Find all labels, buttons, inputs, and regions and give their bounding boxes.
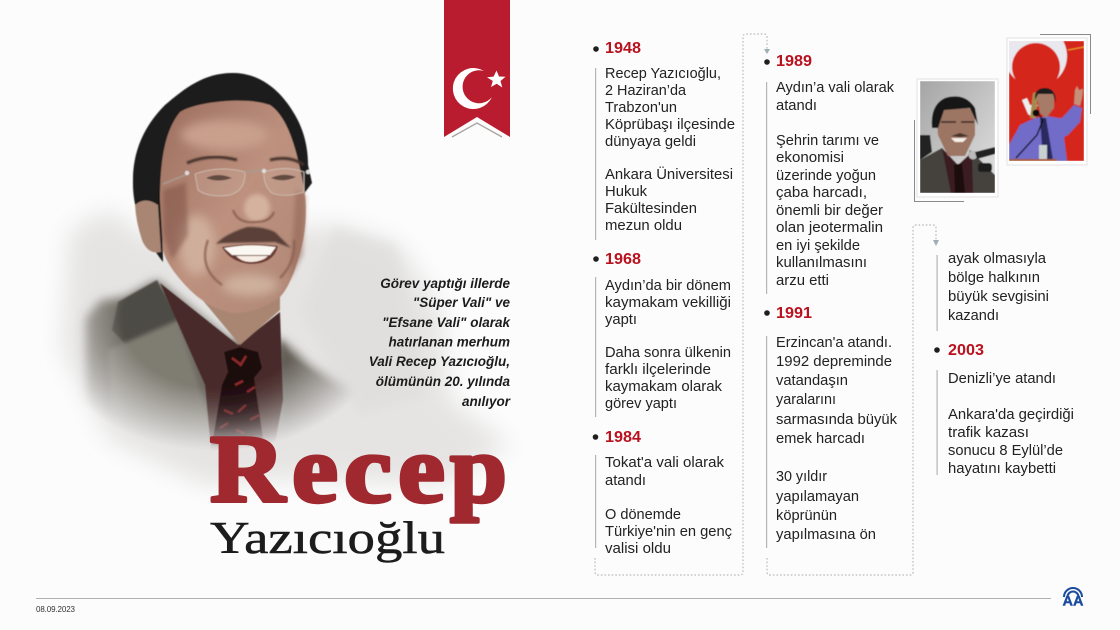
face bbox=[160, 101, 306, 313]
brows bbox=[187, 157, 304, 165]
timeline column 2 bbox=[764, 53, 898, 548]
title: Recep: R bbox=[210, 416, 287, 522]
title: Recep: p bbox=[450, 416, 507, 522]
1948 entry: Hukuk bbox=[605, 184, 648, 200]
1984 entry: 1984 bbox=[605, 429, 641, 446]
1989 entry: en iyi şekilde bbox=[776, 238, 860, 254]
1984 entry: valisi oldu bbox=[605, 541, 671, 557]
1968 entry: yaptı bbox=[605, 312, 637, 328]
timeline column 3 bbox=[934, 251, 1074, 477]
1991 entry: yapılamayan bbox=[776, 489, 859, 505]
1968 entry: farklı ilçelerinde bbox=[605, 362, 711, 378]
smile crease bbox=[205, 240, 294, 285]
1984 entry: Türkiye'nin en genç bbox=[605, 524, 732, 540]
tie bbox=[212, 347, 264, 445]
title: Recep: e bbox=[292, 416, 338, 522]
hair bbox=[133, 73, 312, 262]
photo: raised arm in front of flag bbox=[1005, 25, 1090, 165]
1989 entry: önemli bir değer bbox=[776, 203, 883, 219]
1989 entry: atandı bbox=[776, 98, 817, 114]
intro paragraph: anılıyor bbox=[462, 394, 511, 409]
1948 entry: Recep Yazıcıoğlu, bbox=[605, 66, 721, 82]
2003 entry: sonucu 8 Eylül’de bbox=[948, 443, 1063, 459]
1991 entry: 1991 bbox=[776, 305, 812, 322]
1991 entry: 1992 depreminde bbox=[776, 354, 892, 370]
continued text: bölge halkının bbox=[948, 270, 1040, 286]
1968 entry bbox=[593, 251, 731, 417]
1989 entry: Aydın’a vali olarak bbox=[776, 80, 895, 96]
intro paragraph: "Süper Vali" ve bbox=[413, 295, 510, 310]
1991 entry: vatandaşın bbox=[776, 373, 848, 389]
1984 entry bbox=[593, 429, 732, 557]
1948 entry: 2 Haziran’da bbox=[605, 83, 686, 99]
star bbox=[487, 70, 506, 88]
cheek highlights bbox=[179, 215, 215, 275]
continued text: kazandı bbox=[948, 308, 999, 324]
arrow: to 1989 bbox=[764, 49, 770, 54]
icon: AA logo: AA bbox=[1062, 592, 1084, 608]
1984 entry: atandı bbox=[605, 473, 646, 489]
footer rule bbox=[36, 598, 1051, 599]
2003 entry: Ankara'da geçirdiği bbox=[948, 407, 1074, 423]
continued text: ayak olmasıyla bbox=[948, 251, 1046, 267]
timeline connector dashes bbox=[595, 34, 936, 575]
1968 entry: görev yaptı bbox=[605, 396, 677, 412]
1991 entry bbox=[764, 305, 898, 548]
crescent bbox=[453, 68, 492, 109]
glasses bbox=[195, 168, 304, 196]
title: Recep: e bbox=[398, 416, 445, 522]
1948 entry bbox=[593, 40, 735, 240]
forehead highlight bbox=[181, 120, 269, 150]
1948 entry: mezun oldu bbox=[605, 218, 682, 234]
1948 entry: Fakültesinden bbox=[605, 201, 697, 217]
watercolour wash behind portrait bbox=[62, 210, 510, 485]
jacket bbox=[80, 275, 349, 447]
timeline column 1 bbox=[593, 40, 735, 557]
continued text: büyük sevgisini bbox=[948, 289, 1049, 305]
neck bbox=[190, 285, 280, 345]
1991 entry: emek harcadı bbox=[776, 431, 865, 447]
1989 entry bbox=[764, 53, 895, 294]
intro paragraph: Görev yaptığı illerde bbox=[380, 276, 510, 291]
moustache bbox=[216, 227, 291, 248]
1968 entry: Daha sonra ülkenin bbox=[605, 345, 731, 361]
1989 entry: üzerinde yoğun bbox=[776, 168, 876, 184]
1989 entry: çaba harcadı, bbox=[776, 185, 867, 201]
intro paragraph: hatırlanan merhum bbox=[388, 334, 510, 350]
1989 entry: Şehrin tarımı ve bbox=[776, 133, 879, 149]
2003 entry: hayatını kaybetti bbox=[948, 461, 1056, 477]
mouth bbox=[222, 244, 278, 264]
1991 entry: yaralarını bbox=[776, 392, 836, 408]
2003 entry bbox=[934, 342, 1074, 477]
1948 entry: dünyaya geldi bbox=[605, 134, 696, 150]
1948 entry: 1948 bbox=[605, 40, 641, 57]
shirt bbox=[160, 283, 283, 460]
title: Yazıcıoğlu: Yazıcıoğlu bbox=[210, 513, 445, 563]
ribbon with Turkish crescent and star bbox=[444, 0, 510, 137]
title: Recep bbox=[210, 416, 507, 522]
2003 entry: trafik kazası bbox=[948, 425, 1029, 441]
photo: speaking at microphone bbox=[914, 79, 998, 202]
1968 entry: kaymakam vekilliği bbox=[605, 295, 731, 311]
1984 entry: O dönemde bbox=[605, 507, 681, 523]
1991 entry: köprünün bbox=[776, 508, 837, 524]
1968 entry: 1968 bbox=[605, 251, 641, 268]
intro paragraph: ölümünün 20. yılında bbox=[376, 374, 510, 389]
1989 entry: ekonomisi bbox=[776, 150, 844, 166]
ear bbox=[135, 200, 161, 252]
eyes bbox=[206, 175, 296, 180]
arrow: to column three bbox=[933, 240, 939, 246]
1968 entry: Aydın’da bir dönem bbox=[605, 278, 731, 294]
nose shadow bbox=[233, 210, 274, 222]
1989 entry: arzu etti bbox=[776, 273, 829, 289]
1984 entry: Tokat'a vali olarak bbox=[605, 455, 725, 471]
2003 entry: 2003 bbox=[948, 342, 984, 359]
intro paragraph: "Efsane Vali" olarak bbox=[382, 315, 511, 330]
1948 entry: Ankara Üniversitesi bbox=[605, 165, 733, 183]
intro paragraph bbox=[369, 276, 511, 409]
date: 08.09.2023 bbox=[36, 605, 76, 614]
1991 entry: Erzincan'a atandı. bbox=[776, 335, 892, 351]
1989 entry: kullanılmasını bbox=[776, 255, 867, 271]
1989 entry: 1989 bbox=[776, 53, 812, 70]
portrait: Recep Yazıcıoğlu bbox=[80, 72, 349, 450]
1991 entry: 30 yıldır bbox=[776, 469, 827, 485]
1948 entry: Trabzon'un bbox=[605, 100, 677, 116]
shadow at temple bbox=[163, 182, 188, 260]
1948 entry: Köprübaşı ilçesinde bbox=[605, 117, 735, 133]
title: Recep: c bbox=[344, 416, 392, 522]
continued text bbox=[936, 251, 1049, 331]
intro paragraph: Vali Recep Yazıcıoğlu, bbox=[369, 354, 510, 369]
1991 entry: yapılmasına ön bbox=[776, 527, 876, 543]
1991 entry: sarmasında büyük bbox=[776, 412, 898, 428]
2003 entry: Denizli’ye atandı bbox=[948, 371, 1056, 387]
1989 entry: olan jeotermalin bbox=[776, 220, 883, 236]
1968 entry: kaymakam olarak bbox=[605, 379, 723, 395]
teeth bbox=[224, 245, 276, 255]
